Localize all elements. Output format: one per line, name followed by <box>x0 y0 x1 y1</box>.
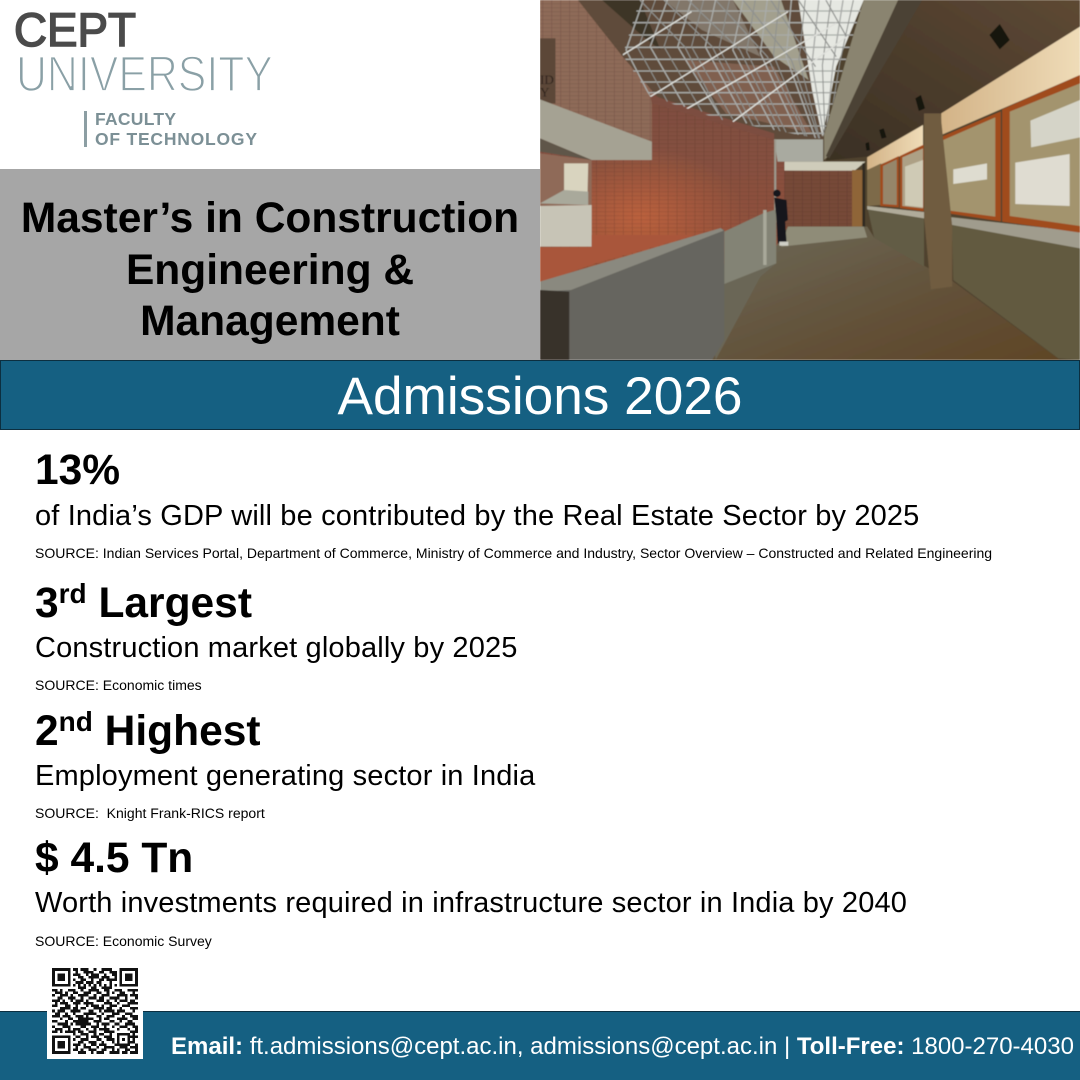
heading: programme name: Engineering & <box>126 246 414 294</box>
figure: 3rd Largest <box>35 578 252 627</box>
contact details: Email: ft.admissions@cept.ac.in, admissions@cept.ac.in | Toll-Free: 1800-270-4030 <box>171 1033 1074 1060</box>
banner: Admissions 2026 <box>0 360 1080 430</box>
stat: 2nd highest <box>35 706 536 821</box>
panel: programme title <box>0 169 540 360</box>
description: of India’s GDP will be contributed by the Real Estate Sector by 2025 <box>35 500 919 532</box>
spotlights <box>865 24 1010 151</box>
description: Employment generating sector in India <box>35 760 535 792</box>
stat: 3rd largest <box>35 578 518 693</box>
source: SOURCE: Knight Frank-RICS report <box>35 805 265 821</box>
footer: contact bar <box>0 1011 1080 1080</box>
photo: brick and concrete campus interior: Y <box>540 86 549 100</box>
source: SOURCE: Economic Survey <box>35 933 212 949</box>
truss <box>623 0 864 138</box>
description: Construction market globally by 2025 <box>35 632 518 664</box>
logo: CEPT University Faculty of Technology: FACULTY <box>95 109 176 129</box>
figure: 13% <box>35 447 120 494</box>
logo: CEPT University Faculty of Technology <box>14 3 273 149</box>
photo: brick and concrete campus interior <box>540 0 1080 360</box>
person <box>773 190 788 246</box>
figure: 2nd Highest <box>35 706 261 755</box>
source: SOURCE: Indian Services Portal, Department of Commerce, Ministry of Commerce and Industry, Sector Overview – Constructed and Related Engineering <box>35 545 992 561</box>
heading: programme name <box>21 195 519 345</box>
figure: $ 4.5 Tn <box>35 835 193 882</box>
banner: Admissions 2026: Admissions 2026 <box>337 367 743 426</box>
logo: CEPT University Faculty of Technology: CEPT <box>14 3 136 56</box>
logo: CEPT University Faculty of Technology: OF TECHNOLOGY <box>95 129 257 149</box>
heading: programme name: Management <box>140 298 400 345</box>
stat: $4.5 Tn <box>35 835 907 949</box>
heading: programme name: Master’s in Construction <box>21 195 519 242</box>
photo: brick and concrete campus interior: ID <box>540 73 554 87</box>
description: Worth investments required in infrastructure sector in India by 2040 <box>35 887 907 919</box>
QR code <box>47 968 143 1059</box>
source: SOURCE: Economic times <box>35 677 202 693</box>
stat: 13% of GDP <box>35 447 992 561</box>
